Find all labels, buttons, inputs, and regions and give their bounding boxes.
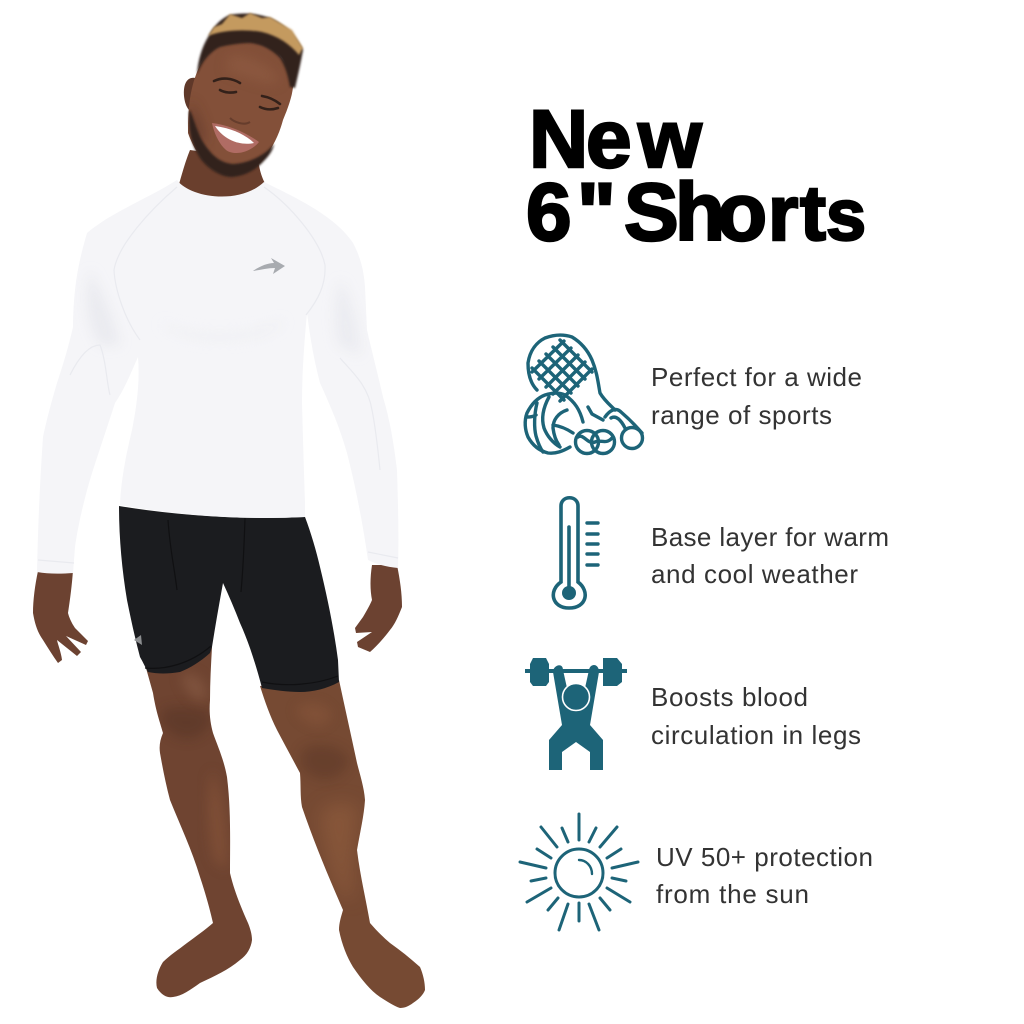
head [188, 41, 293, 164]
title: h [675, 167, 725, 258]
text: weather: Base layer for warm [651, 522, 889, 552]
left leg [146, 647, 252, 997]
left hand [33, 570, 88, 663]
title: S [624, 167, 679, 258]
text: circulation [651, 682, 861, 750]
text: sports: Perfect for a wide [651, 362, 862, 392]
nose [230, 118, 250, 124]
text: sports: range of sports [651, 400, 832, 430]
title: 6 [526, 167, 572, 258]
title [526, 94, 866, 258]
title: s [826, 176, 866, 256]
eyebrows and eyes [214, 79, 280, 109]
shirt [37, 180, 398, 574]
title: " [577, 167, 616, 258]
shorts [119, 506, 339, 692]
text: sports [651, 362, 862, 430]
title: r [768, 169, 798, 257]
icon: racket and balls [525, 335, 642, 454]
hair tips [208, 13, 303, 55]
text: circulation: circulation in legs [651, 720, 861, 750]
title: t [800, 169, 826, 257]
text: weather [651, 522, 889, 589]
text: uv: from the sun [656, 879, 809, 909]
ear [184, 78, 196, 112]
right hand [355, 565, 402, 652]
text: uv: UV 50+ protection [656, 842, 873, 872]
right leg [260, 680, 425, 1008]
photo: man in white shirt and black shorts [33, 13, 425, 1008]
icon: thermometer [553, 498, 598, 608]
icon: sun [520, 814, 638, 930]
text: weather: and cool weather [651, 559, 858, 589]
text: circulation: Boosts blood [651, 682, 808, 712]
hair [197, 14, 303, 88]
title: o [717, 167, 767, 258]
shirt logo [253, 258, 285, 274]
beard [189, 110, 274, 177]
text: uv [656, 842, 873, 909]
title: New [529, 94, 702, 185]
icon: weightlifter [525, 658, 627, 770]
neck [178, 150, 266, 200]
smile [212, 123, 259, 153]
